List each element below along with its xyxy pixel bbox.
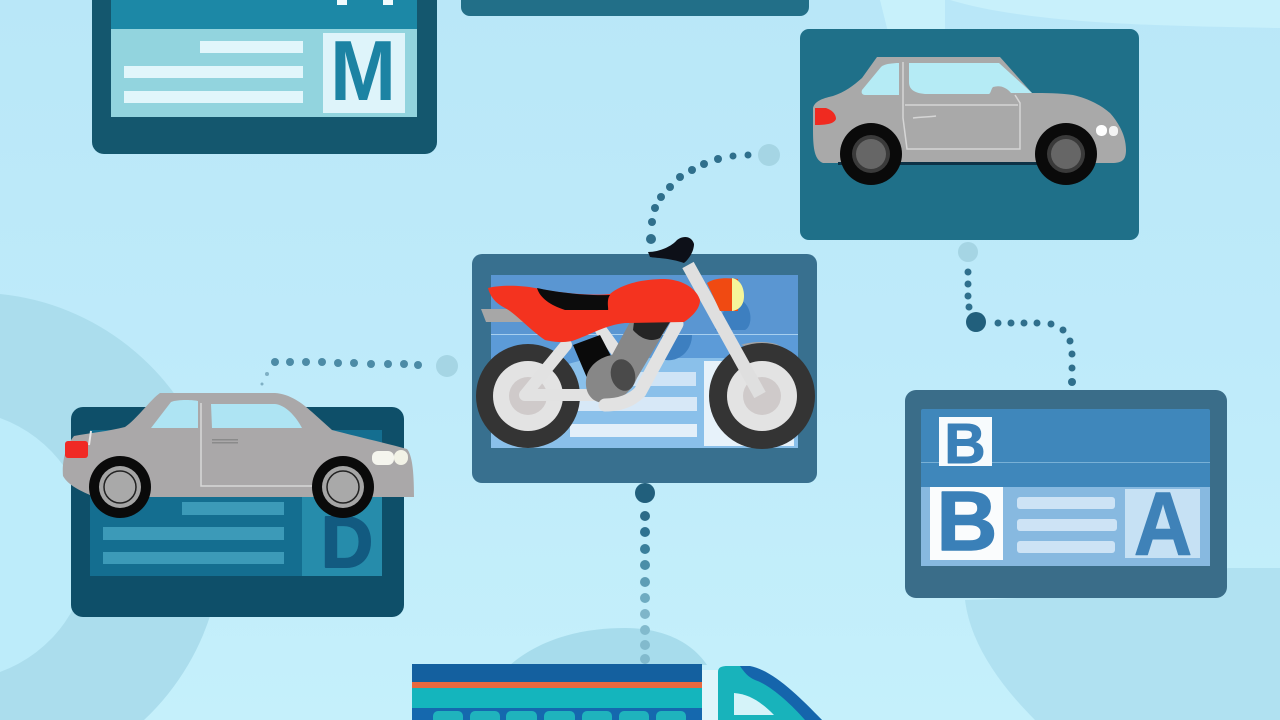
engine (586, 322, 670, 403)
icon: grey car top right (813, 57, 1126, 185)
icon: red motorcycle (476, 237, 815, 449)
icon: bus or truck at bottom (412, 664, 822, 720)
truck cab (718, 666, 822, 720)
panel: licence card D (71, 407, 404, 617)
handlebar (648, 237, 694, 263)
letter B large: B (937, 474, 997, 568)
wheel front (1035, 123, 1097, 185)
icon: grey car left (63, 393, 414, 518)
letter M: M (330, 24, 396, 119)
headlight (707, 278, 744, 311)
connector: car card to licence card B A (958, 242, 1076, 386)
connector: bottom dotted line to truck (635, 483, 655, 664)
panel: car card top right (800, 29, 1139, 240)
connector: motorcycle card to car card (646, 144, 780, 244)
tank and seat (488, 279, 700, 342)
licence header marks (337, 0, 393, 5)
letter A: A (1134, 474, 1192, 575)
connector: motorcycle card to car on D card (260, 355, 458, 386)
engine frame tube (605, 324, 677, 405)
wheel rear (840, 123, 902, 185)
panel: partial card top centre (461, 0, 809, 16)
panel: motorcycle licence card (472, 254, 817, 483)
rear wheel (476, 344, 580, 448)
front wheel (709, 342, 815, 449)
panel: licence card B A (905, 390, 1227, 598)
letter B small: B (944, 412, 986, 476)
letter D: D (321, 503, 373, 583)
truck windows (433, 711, 686, 720)
panel: licence card M (92, 0, 437, 154)
fork (688, 265, 760, 395)
wheel rear (89, 456, 151, 518)
wheel front (312, 456, 374, 518)
rear frame (525, 330, 617, 395)
